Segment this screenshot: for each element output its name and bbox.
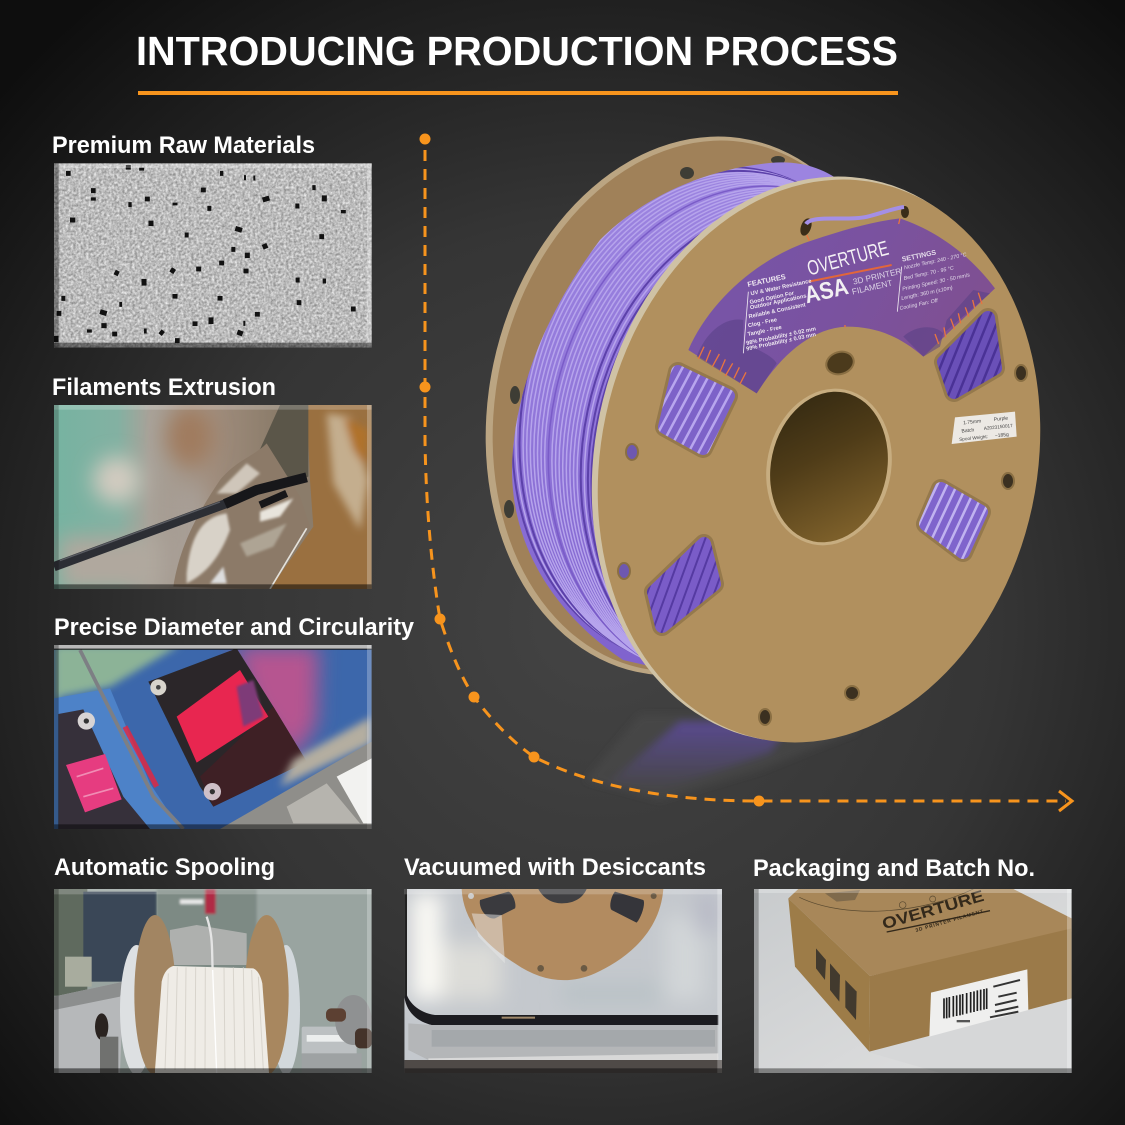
process flow arrow — [420, 134, 1072, 811]
features: 98% Probability ± 0.02 mm — [746, 326, 817, 347]
settings: Printing Speed: 30 - 50 mm/s — [902, 272, 971, 293]
product subtitle — [851, 266, 902, 297]
product subtitle: FILAMENT — [851, 278, 893, 297]
photo: box: OVERTURE — [880, 888, 986, 933]
batch sticker: Purple — [994, 415, 1009, 423]
photo: box — [754, 888, 1072, 1073]
step 4: automatic spooling — [54, 854, 372, 1075]
back flange — [437, 97, 951, 715]
photo: laser gauge — [54, 644, 372, 829]
features — [746, 272, 817, 353]
features: Outdoor Applications — [750, 293, 807, 311]
features: Good Option For — [749, 291, 795, 306]
photo: spooling machine — [54, 889, 372, 1075]
mountain art — [697, 290, 990, 393]
product subtitle: 3D PRINTER — [852, 266, 902, 287]
logo: OVERTURE — [805, 237, 891, 280]
features: Tangle - Free — [747, 325, 782, 338]
step 6 heading: Packaging and Batch No. — [753, 855, 1035, 882]
photo: plastic pellets — [54, 163, 372, 347]
photo: box: 3D PRINTER FILAMENT — [915, 909, 984, 934]
step 6: packaging and batch no — [753, 855, 1072, 1073]
step 5 heading: Vacuumed with Desiccants — [404, 854, 706, 881]
window: lower right — [926, 489, 981, 552]
label band — [688, 218, 995, 393]
step 4 heading: Automatic Spooling — [54, 854, 275, 881]
filament end through slot — [806, 207, 904, 224]
filament slot ends — [798, 206, 909, 237]
batch sticker: Batch — [961, 427, 975, 435]
title — [136, 28, 898, 95]
logo underline — [809, 265, 892, 282]
step 2: filaments extrusion — [52, 374, 372, 590]
step 1 heading: Premium Raw Materials — [52, 132, 315, 159]
features: Clog - Free — [748, 317, 778, 329]
batch sticker: ~185g — [995, 432, 1009, 439]
photo: extrusion bath — [54, 405, 372, 590]
batch sticker: Spool Weight: — [959, 434, 988, 442]
settings — [899, 249, 971, 312]
settings: Length: 360 m (±10m) — [901, 285, 954, 302]
batch sticker: 1.75mm — [963, 418, 981, 426]
front flange — [547, 138, 1091, 784]
step 2 heading: Filaments Extrusion — [52, 374, 276, 401]
features: UV & Water Resistance — [750, 279, 812, 297]
features: 99% Probability ± 0.03 mm — [746, 332, 817, 353]
product name: ASA — [802, 273, 851, 309]
batch sticker — [952, 412, 1017, 444]
window: upper left — [665, 372, 728, 448]
features: Reliable & Consistent — [748, 302, 806, 320]
step 5: vacuumed with desiccants — [404, 854, 722, 1073]
spool reflection — [585, 715, 860, 800]
wound purple filament — [512, 162, 834, 666]
settings: SETTINGS — [901, 249, 937, 264]
orange ticks — [698, 218, 982, 384]
title: INTRODUCING PRODUCTION PROCESS — [136, 28, 898, 74]
settings: Nozzle Temp: 240 - 270 °C — [903, 252, 967, 271]
filament spool — [486, 136, 1040, 742]
step 1: premium raw materials — [52, 132, 372, 347]
photo: vacuum bag — [404, 889, 722, 1073]
small holes — [618, 348, 1027, 725]
step 3 heading: Precise Diameter and Circularity — [54, 614, 415, 641]
step 3: precise diameter and circularity — [54, 614, 415, 829]
settings: Cooling Fan: Off — [899, 298, 939, 312]
front flange edge — [541, 135, 1087, 783]
batch sticker: A2023150017 — [984, 423, 1013, 431]
hub hole — [752, 377, 906, 557]
window: lower left — [654, 544, 714, 626]
window: upper right — [944, 318, 995, 392]
spool label — [688, 218, 1017, 444]
features: FEATURES — [747, 272, 787, 289]
settings: Bed Temp: 70 - 95 °C — [903, 265, 955, 282]
